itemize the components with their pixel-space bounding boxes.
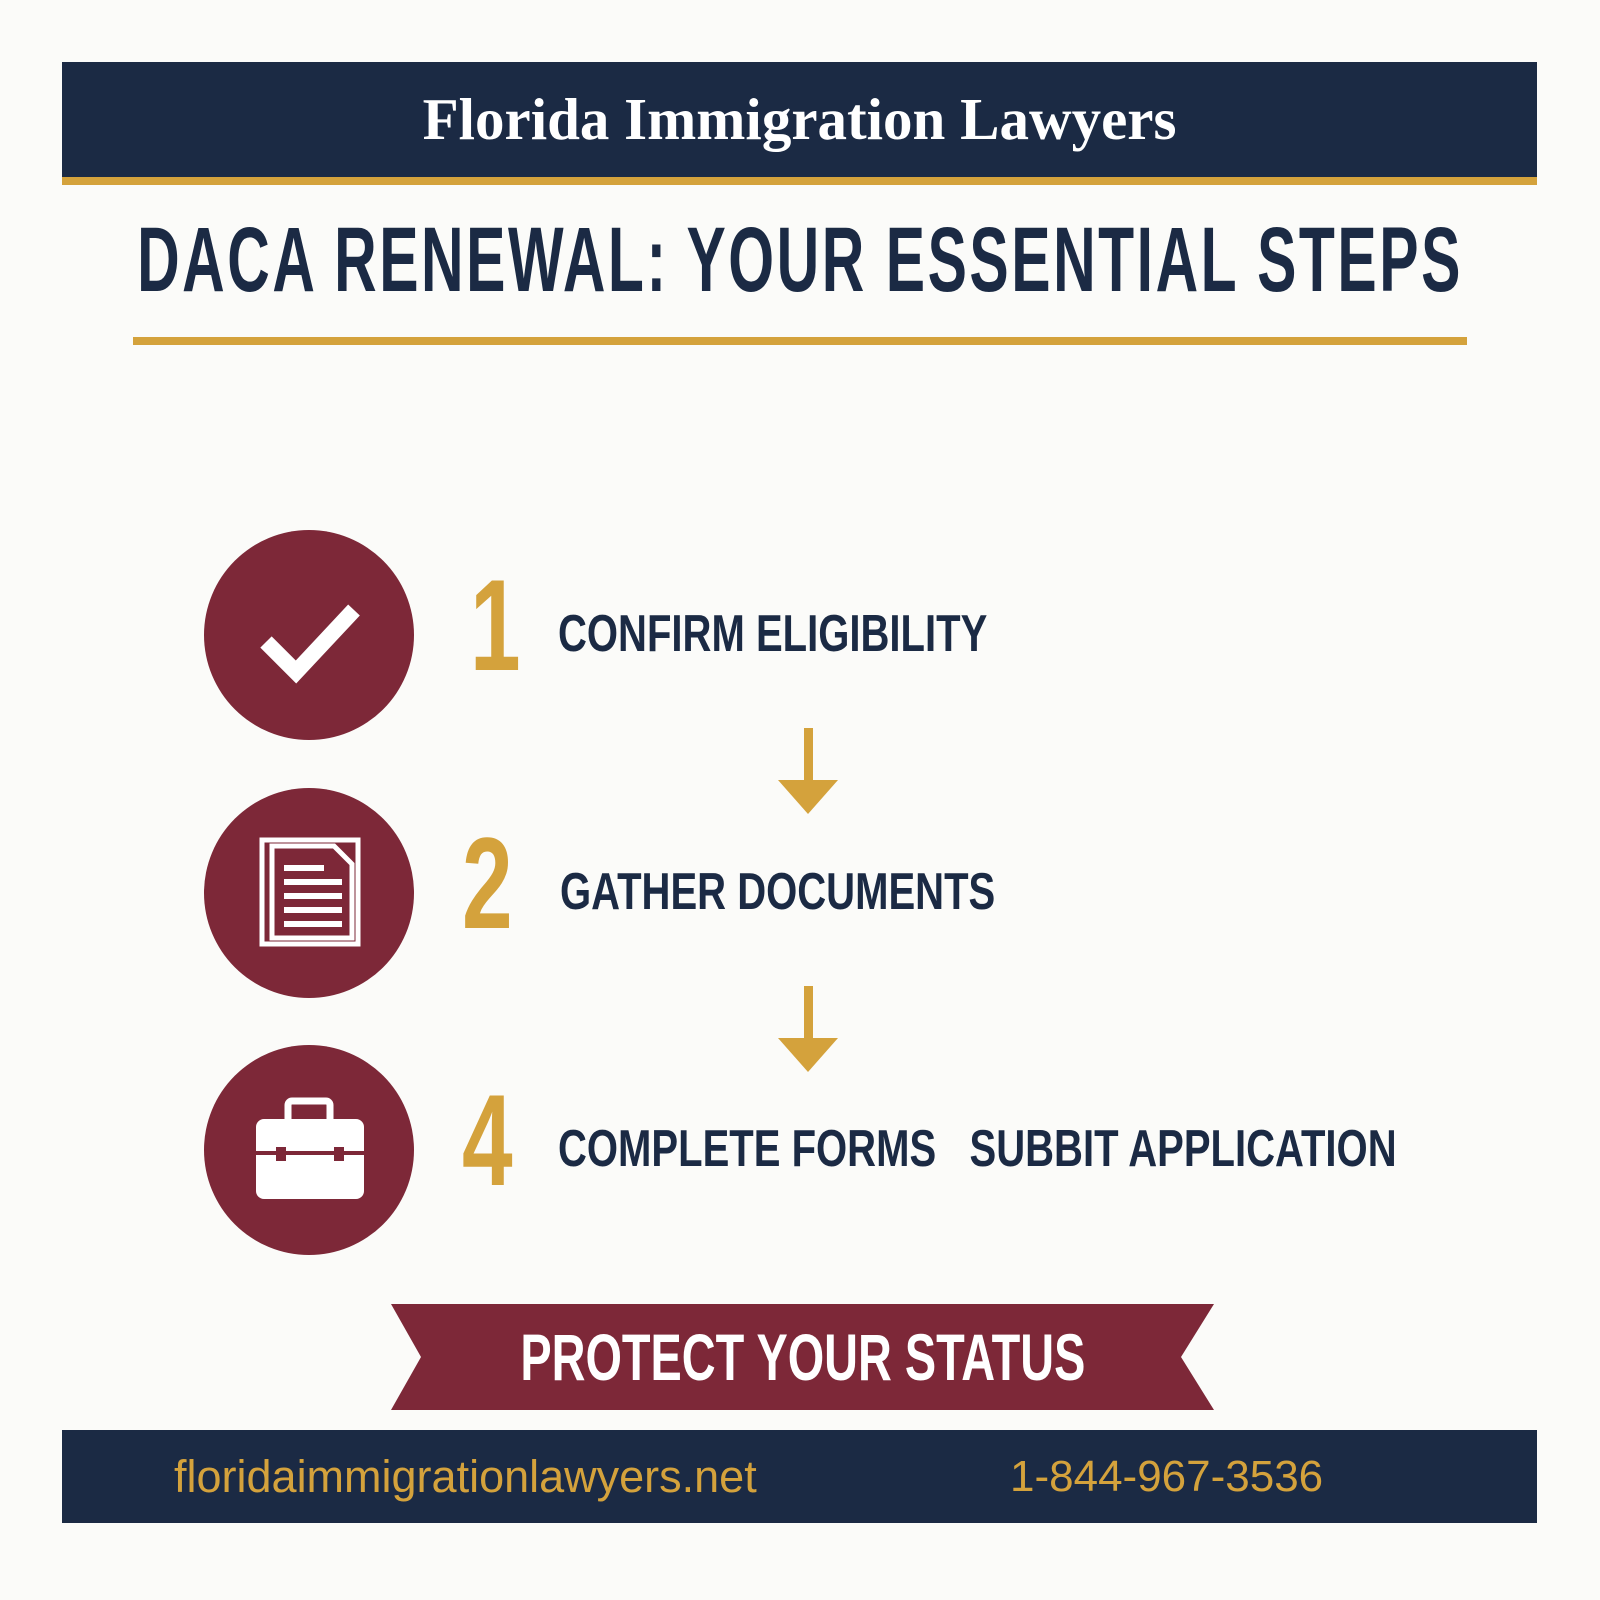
arrow 2 — [778, 986, 838, 1072]
number 1: 1 — [470, 552, 521, 698]
icon: check circle — [204, 530, 414, 740]
step 3 label: COMPLETE FORMS SUBBIT APPLICATION — [558, 1120, 1397, 1178]
header title: Florida Immigration Lawyers — [423, 86, 1176, 152]
banner: protect your status — [391, 1304, 1214, 1410]
main title: DACA RENEWAL: YOUR ESSENTIAL STEPS — [137, 209, 1463, 311]
header bar — [62, 62, 1537, 185]
step 2 label: GATHER DOCUMENTS — [560, 863, 995, 921]
step 1 — [204, 530, 987, 740]
number 2: 2 — [462, 810, 513, 956]
number 4: 4 — [462, 1067, 513, 1213]
icon: documents circle — [204, 788, 414, 998]
icon: briefcase circle — [204, 1045, 414, 1255]
banner text: PROTECT YOUR STATUS — [520, 1320, 1085, 1394]
step 1 label: CONFIRM ELIGIBILITY — [558, 605, 987, 663]
arrow 1 — [778, 728, 838, 814]
step 2 — [204, 788, 995, 998]
website: floridaimmigrationlawyers.net — [174, 1451, 757, 1502]
step 3 — [204, 1045, 1397, 1255]
title underline — [133, 337, 1467, 345]
footer bar — [62, 1430, 1537, 1523]
phone: 1-844-967-3536 — [1010, 1452, 1323, 1501]
